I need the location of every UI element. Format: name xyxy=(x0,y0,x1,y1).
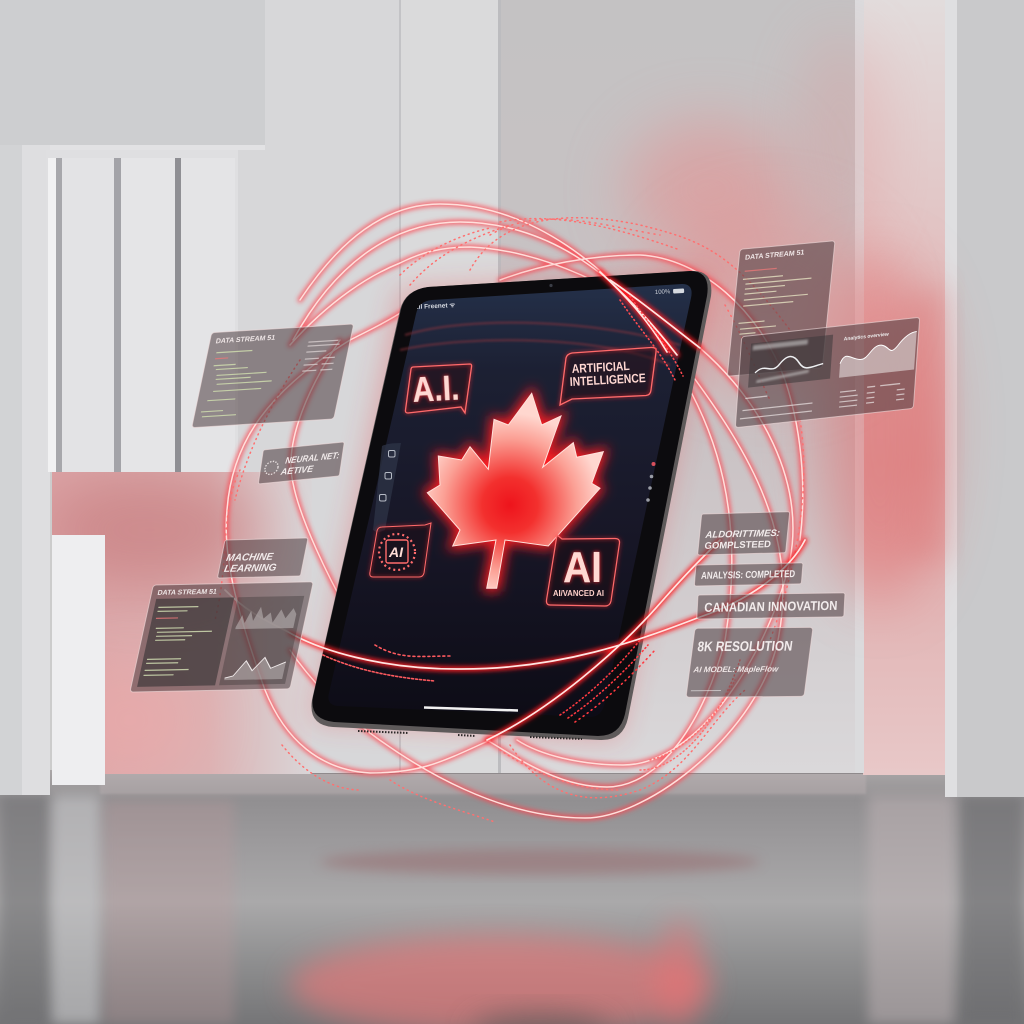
tablet body xyxy=(311,271,711,740)
bottom speakers xyxy=(358,731,582,739)
tablet glow xyxy=(312,272,712,738)
panel: analytics upper right xyxy=(735,317,920,428)
label: 8K RESOLUTION xyxy=(697,638,794,654)
left chart xyxy=(748,335,833,388)
badge: A.I.: A.I. xyxy=(411,369,460,410)
model: AI MODEL: MapleFlow xyxy=(692,665,780,674)
particle trails xyxy=(215,218,804,822)
badge: artificial intelligence: ARTIFICIAL xyxy=(571,359,630,376)
screen arcs xyxy=(400,323,680,365)
icon: chip xyxy=(379,534,415,570)
tablet xyxy=(311,271,712,740)
right chart: Analytics overview xyxy=(844,332,889,342)
icon: neural globe xyxy=(264,461,279,475)
panel: neural net status xyxy=(258,442,344,484)
heading: DATA STREAM 51 xyxy=(157,588,218,597)
panel: 8K resolution xyxy=(686,627,813,697)
side toolbar xyxy=(373,443,401,532)
orbit rings behind the tablet xyxy=(226,204,803,818)
label: MACHINE xyxy=(225,552,274,564)
right chart xyxy=(839,329,917,378)
pagination dots xyxy=(646,462,656,502)
tablet screen xyxy=(328,284,692,717)
panel: algorithms completed xyxy=(698,512,790,555)
maple leaf xyxy=(427,393,603,588)
code lines xyxy=(737,265,813,335)
label: ALDORITTIMES: xyxy=(704,528,780,541)
panel: neural net status: AETIVE xyxy=(279,464,315,477)
data tables xyxy=(740,380,905,419)
badge: advanced AI: AI/VANCED AI xyxy=(553,588,604,598)
code lines xyxy=(200,348,278,418)
background: reflective floor xyxy=(0,770,1024,1024)
heading: DATA STREAM 51 xyxy=(745,249,805,262)
charts xyxy=(219,596,304,685)
panel: data stream upper right xyxy=(727,241,835,376)
panel: data stream upper left xyxy=(192,324,354,428)
code area xyxy=(137,597,234,687)
badge: artificial intelligence xyxy=(560,347,656,405)
panel: machine learning xyxy=(217,538,308,578)
label: ANALYSIS: COMPLETED xyxy=(701,569,796,582)
panel: analysis completed xyxy=(694,563,803,586)
label: NEURAL NET: xyxy=(285,450,340,466)
badge: advanced AI: AI xyxy=(563,543,602,592)
panel: data stream lower left xyxy=(130,582,313,692)
side table xyxy=(302,340,341,372)
background: room wall xyxy=(0,0,1024,797)
status bar: .ıl Freenet ᯤ xyxy=(417,302,457,311)
home indicator xyxy=(424,708,518,710)
label: CANADIAN INNOVATION xyxy=(704,598,838,615)
badge: advanced AI xyxy=(546,535,620,606)
panel: machine learning: LEARNING xyxy=(223,563,278,575)
badge: artificial intelligence: INTELLIGENCE xyxy=(569,371,646,389)
panel: algorithms completed: GOMPLSTEED xyxy=(704,539,772,552)
status bar: 100% xyxy=(655,289,671,296)
panel: canadian innovation xyxy=(697,593,845,619)
status bar xyxy=(417,284,684,311)
badge: AI chip xyxy=(370,523,431,577)
background: red haze xyxy=(625,30,945,600)
orbit rings in front of the tablet xyxy=(225,272,805,740)
badge: AI chip: AI xyxy=(388,544,404,560)
heading: DATA STREAM 51 xyxy=(215,334,276,345)
